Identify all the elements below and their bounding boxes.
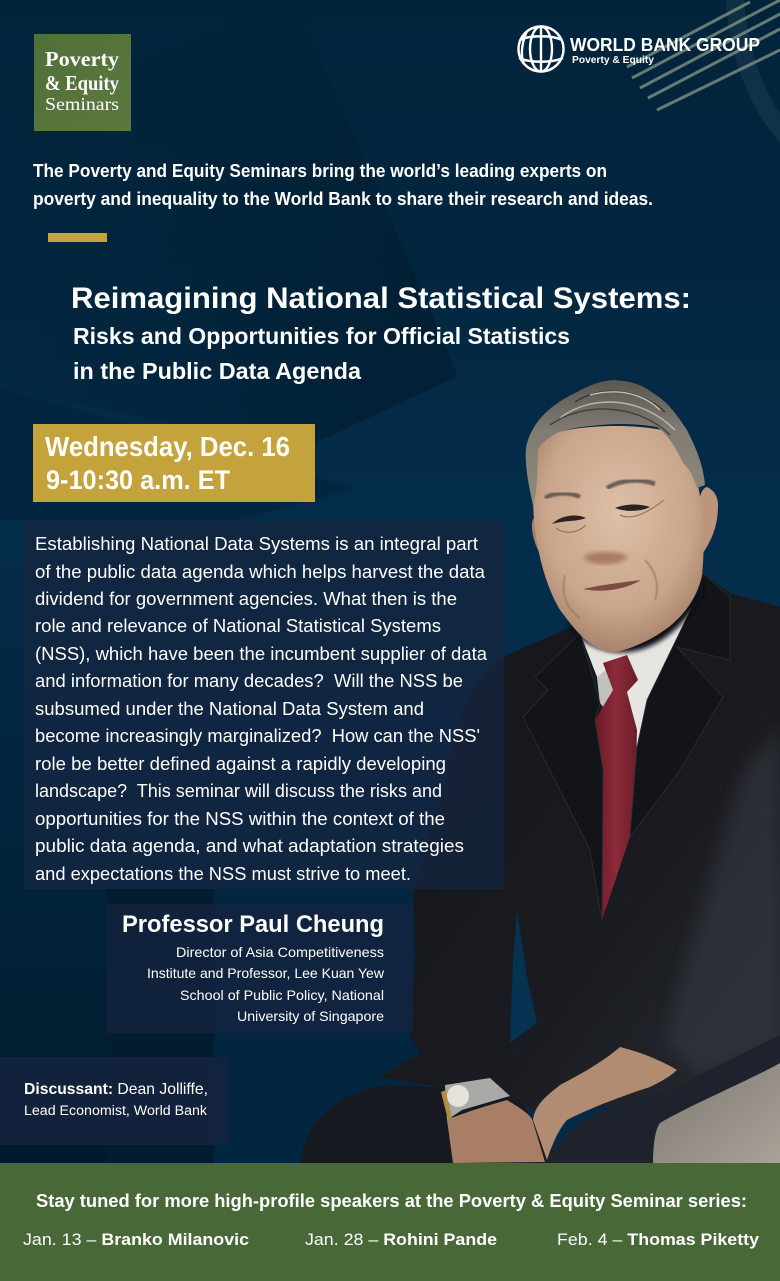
footer: upcoming speakers: Feb. 4 – Thomas Piketty: [557, 1230, 760, 1249]
armchair: [653, 1063, 780, 1163]
hair: [526, 380, 705, 505]
eyes: [552, 516, 586, 524]
panel: seminar description: public data agenda, and what adaptation strategies: [35, 836, 464, 856]
panel: seminar description: role and relevance of National Statistical Systems: [35, 616, 441, 636]
panel: seminar description: Establishing National Data Systems is an integral part: [35, 534, 478, 554]
panel: discussant: Lead Economist, World Bank: [24, 1103, 207, 1118]
mouth: [583, 580, 641, 591]
panel: seminar description: and information for many decades? Will the NSS be: [35, 671, 463, 691]
title: Reimagining National Statistical Systems:: [71, 282, 691, 315]
head: [526, 380, 718, 653]
panel: speaker: Professor Paul Cheung: [122, 911, 384, 938]
panel: speaker: School of Public Policy, National: [180, 987, 384, 1003]
sleeve highlight: [665, 730, 780, 1075]
intro text: The Poverty and Equity Seminars bring the world’s leading experts on: [33, 161, 607, 181]
date box: Wednesday, Dec. 16: [45, 431, 290, 462]
logo: World Bank Group: WORLD BANK GROUP: [570, 35, 760, 55]
jacket: [380, 573, 780, 1115]
badge: Poverty & Equity Seminars: Poverty: [45, 47, 120, 71]
intro text: poverty and inequality to the World Bank to share their research and ideas.: [33, 189, 653, 209]
footer: upcoming speakers: Jan. 13 – Branko Milanovic: [23, 1230, 249, 1249]
panel: seminar description: [24, 521, 504, 889]
panel: seminar description: and expectations the NSS must strive to meet.: [35, 864, 411, 884]
panel: seminar description: landscape? This seminar will discuss the risks and: [35, 781, 442, 801]
panel: speaker: University of Singapore: [237, 1008, 384, 1024]
date box: 9-10:30 a.m. ET: [46, 465, 230, 495]
wristwatch: [441, 1078, 510, 1120]
nose: [583, 552, 628, 564]
panel: seminar description: (NSS), which have been the incumbent supplier of data: [35, 644, 488, 664]
footer: upcoming speakers: [0, 1163, 780, 1281]
intro text: [33, 161, 653, 209]
necktie: [595, 655, 638, 920]
trousers: [300, 1085, 560, 1163]
badge: Poverty & Equity Seminars: & Equity: [45, 71, 119, 95]
icon: globe: [518, 26, 564, 72]
hands: [447, 1100, 545, 1163]
panel: seminar description: subsumed under the National Data System and: [35, 699, 424, 719]
panel: seminar description: become increasingly marginalized? How can the NSS': [35, 726, 480, 746]
shirt: [580, 607, 692, 747]
panel: seminar description: opportunities for the NSS within the context of the: [35, 809, 445, 829]
panel: seminar description: of the public data agenda which helps harvest the data: [35, 562, 486, 582]
ears: [698, 487, 718, 553]
panel: seminar description: dividend for government agencies. What then is the: [35, 589, 457, 609]
lapels: [523, 573, 730, 920]
panel: discussant: [0, 1057, 229, 1145]
date box: [33, 424, 315, 502]
face: [533, 426, 704, 653]
badge: Poverty & Equity Seminars: Seminars: [45, 94, 119, 114]
footer: upcoming speakers: Stay tuned for more high-profile speakers at the Poverty & Equity Seminar series:: [36, 1191, 747, 1211]
speaker photo illustration: [300, 380, 780, 1163]
gap between arm and torso: [510, 910, 537, 1043]
gold accent bar: [48, 233, 107, 242]
badge: Poverty & Equity Seminars: [34, 34, 131, 131]
eyebrows: [545, 493, 580, 498]
shadow under chin: [560, 580, 703, 652]
panel: speaker: Institute and Professor, Lee Kuan Yew: [147, 965, 385, 981]
panel: seminar description: role be better defined against a rapidly developing: [35, 754, 446, 774]
title: in the Public Data Agenda: [73, 358, 361, 384]
panel: speaker: Director of Asia Competitiveness: [176, 944, 384, 960]
logo: World Bank Group: Poverty & Equity: [572, 54, 654, 66]
panel: discussant: Discussant: Dean Jolliffe,: [24, 1081, 208, 1098]
title: [71, 282, 691, 384]
panel: speaker: [107, 904, 413, 1033]
hair streaks: [550, 391, 675, 435]
decorative stripes: [627, 0, 780, 110]
title: Risks and Opportunities for Official Statistics: [73, 323, 570, 349]
logo: World Bank Group: [518, 26, 760, 72]
footer: upcoming speakers: Jan. 28 – Rohini Pande: [305, 1230, 497, 1249]
